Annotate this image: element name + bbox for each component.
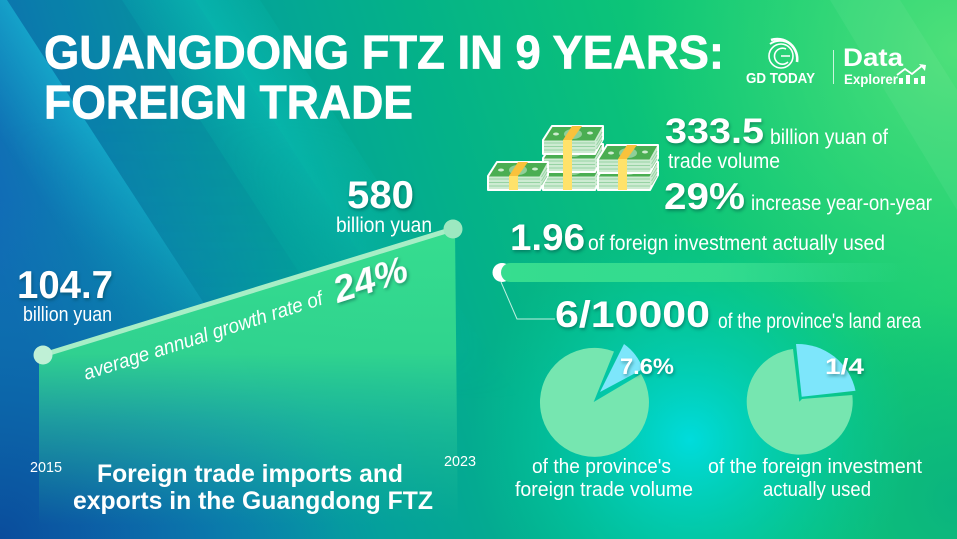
year 2015: 2015: [30, 459, 62, 476]
pie chart: 7.6% of trade volume: 7.6%: [620, 354, 674, 379]
stat: land area: of the province's land area: [718, 310, 921, 333]
pie chart: 1/4 of foreign investment: [708, 344, 922, 501]
chart caption: exports in the Guangdong FTZ: [73, 487, 433, 515]
pie chart: 7.6% of trade volume: foreign trade volume: [515, 479, 693, 501]
area chart: foreign trade growth: [17, 174, 476, 539]
value 2023: 580: [347, 174, 414, 217]
pie chart: 7.6% of trade volume: [515, 344, 693, 501]
pie chart: 1/4 of foreign investment: actually used: [763, 479, 871, 501]
stat: land area: [555, 294, 921, 335]
value 2023: [336, 174, 432, 237]
value 2015: 104.7: [17, 264, 113, 307]
growth rate label: 24%: [327, 248, 413, 311]
growth rate label: [81, 248, 413, 385]
chart caption: [73, 460, 433, 515]
title: [44, 26, 724, 128]
stat: year-on-year increase: 29%: [664, 176, 745, 217]
stat: year-on-year increase: [664, 176, 932, 217]
progress bar: [492, 263, 920, 319]
year 2023: 2023: [444, 453, 476, 470]
stat: foreign investment: of foreign investment actually used: [588, 232, 885, 255]
end point: [444, 220, 462, 238]
chart area fill: [39, 229, 458, 539]
pie chart: 1/4 of foreign investment: of the foreign investment: [708, 456, 922, 478]
title: FOREIGN TRADE: [44, 76, 413, 128]
logo: Data Explorer: Data: [843, 44, 904, 72]
logo: Data Explorer: [833, 44, 926, 87]
stat: trade volume: trade volume: [668, 150, 780, 173]
logo: GD Today: [746, 39, 815, 87]
trend line: [43, 229, 453, 355]
icon: money stacks: [488, 126, 658, 190]
growth rate label: average annual growth rate of: [81, 287, 328, 385]
stat: land area: 6/10000: [555, 294, 710, 335]
stat: trade volume: [665, 112, 888, 173]
value 2015: [17, 264, 113, 326]
stat: foreign investment: [510, 217, 885, 258]
title: GUANGDONG FTZ IN 9 YEARS:: [44, 26, 724, 78]
chart caption: Foreign trade imports and: [97, 460, 403, 488]
stat: trade volume: billion yuan of: [770, 126, 888, 149]
value 2023: billion yuan: [336, 214, 432, 237]
start point: [34, 346, 52, 364]
stat: trade volume: 333.5: [665, 112, 764, 151]
value 2015: billion yuan: [23, 304, 112, 326]
pie chart: 7.6% of trade volume: of the province's: [532, 456, 671, 478]
stat: foreign investment: 1.96: [510, 217, 585, 258]
pie chart: 1/4 of foreign investment: 1/4: [825, 354, 865, 379]
logo: Data Explorer: Explorer: [844, 71, 899, 87]
logo: GD Today: GD TODAY: [746, 70, 815, 87]
stat: year-on-year increase: increase year-on-year: [751, 192, 932, 215]
